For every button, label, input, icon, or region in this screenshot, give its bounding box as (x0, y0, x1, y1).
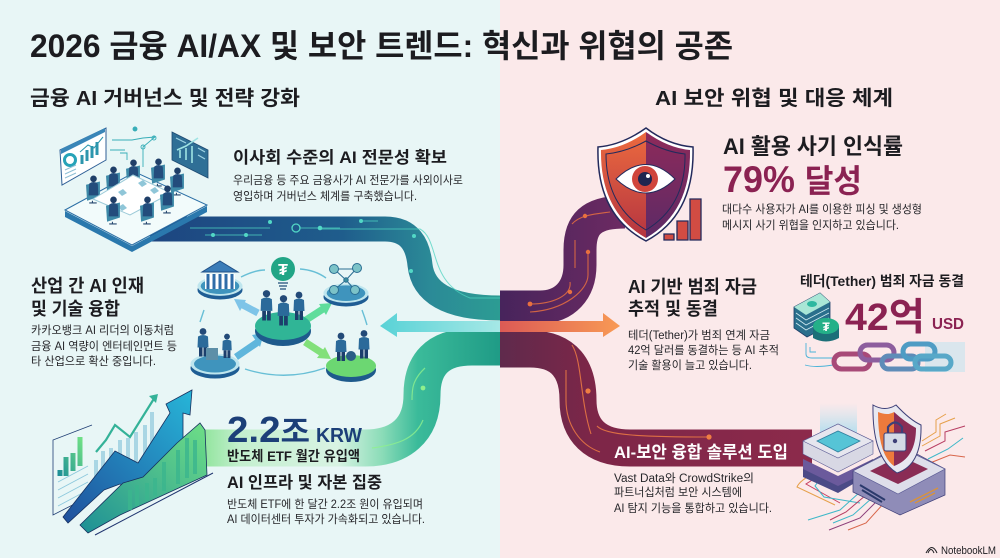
icon: shield with eye (598, 128, 701, 241)
text: fund tracing: 42억 달러를 동결하는 등 AI 추적 (628, 343, 779, 357)
text: solution description: AI 탐지 기능을 통합하고 있습니다. (614, 501, 772, 515)
text: solution description: Vast Data와 CrowdStrike의 (614, 472, 754, 485)
ribbon: bottom-left capital path (205, 347, 500, 448)
background: right pink panel (500, 0, 1000, 558)
text: fraud awareness (722, 134, 922, 232)
text: board expertise (233, 148, 463, 203)
icon: money stack and tether coin (794, 293, 839, 342)
icon: money stack and tether coin: ₮ (822, 320, 830, 334)
heading: left section: 금융 AI 거버넌스 및 전략 강화 (30, 87, 300, 110)
stat: 2.2 trillion won (227, 409, 362, 464)
tether bulb: ₮ (278, 262, 288, 279)
padlock shield (873, 405, 921, 473)
text: AI infrastructure (227, 473, 425, 526)
right screen (172, 132, 208, 178)
text: fund tracing: 기술 활용이 늘고 있습니다. (628, 358, 752, 372)
text: solution description: 파트너십처럼 보안 시스템에 (614, 486, 742, 499)
text: fraud awareness: 79% 달성 (723, 159, 862, 200)
text: AI infrastructure: AI 데이터센터 투자가 가속화되고 있습니다. (227, 513, 425, 526)
icon: growth chart (53, 390, 213, 535)
stat: 2.2 trillion won: 2.2조 (227, 409, 310, 450)
circuit lines (797, 414, 965, 530)
ribbon: top-right threat path (500, 212, 625, 312)
arrow: left cyan arrow (380, 313, 500, 337)
center platform (255, 290, 311, 346)
heading: right section: AI 보안 위협 및 대응 체계 (655, 87, 893, 110)
lower server (853, 445, 945, 515)
background: left teal panel (0, 0, 500, 558)
text: talent fusion: 타 산업으로 확산 중입니다. (31, 355, 156, 368)
text: board expertise: 우리금융 등 주요 금융사가 AI 전문가를 사외이사로 (233, 174, 463, 187)
handshake platform (326, 330, 376, 382)
stat: tether freeze: 42억 (845, 297, 925, 339)
text: fund tracing: 테더(Tether)가 범죄 연계 자금 (628, 329, 770, 342)
text: board expertise: 영입하며 거버넌스 체계를 구축했습니다. (233, 189, 417, 203)
arrow: right orange arrow (500, 313, 620, 337)
glow beam (820, 403, 857, 445)
text: solution heading on ribbon: AI-보안 융합 솔루션 도입 (614, 443, 788, 462)
text: talent fusion: 카카오뱅크 AI 리더의 이동처럼 (31, 324, 174, 337)
stat: tether freeze: 테더(Tether) 범죄 자금 동결 (800, 273, 964, 289)
text: talent fusion: 산업 간 AI 인재 (31, 276, 144, 296)
stat: tether freeze (800, 273, 964, 339)
icon: isometric boardroom (60, 127, 208, 252)
text: board expertise: 이사회 수준의 AI 전문성 확보 (233, 148, 447, 167)
text: AI infrastructure: AI 인프라 및 자본 집중 (227, 473, 382, 492)
left screen (60, 128, 106, 185)
ribbon: bottom-right solution path (500, 345, 812, 452)
icon: talent network diagram (190, 257, 376, 382)
text: talent fusion: 금융 AI 역량이 엔터테인먼트 등 (31, 340, 177, 353)
network lines above table (110, 127, 156, 167)
upper server (803, 424, 873, 493)
text: fraud awareness: 메시지 사기 위협을 인지하고 있습니다. (722, 218, 899, 232)
people with desk (198, 328, 232, 360)
bank icon (202, 261, 238, 289)
network nodes (330, 264, 362, 294)
connecting arrows (200, 269, 367, 375)
stat: 2.2 trillion won: KRW (316, 425, 362, 447)
text: fraud awareness: AI 활용 사기 인식률 (723, 134, 903, 159)
tether bulb (271, 257, 295, 289)
text: fraud awareness: 대다수 사용자가 AI를 이용한 피싱 및 생성형 (722, 203, 922, 216)
stat: tether freeze: USD (932, 316, 964, 333)
text: talent fusion (31, 276, 177, 368)
text: AI infrastructure: 반도체 ETF에 한 달간 2.2조 원이 유입되며 (227, 497, 423, 511)
text: solution description (614, 472, 772, 515)
ribbon: top-left governance path (150, 219, 500, 308)
text: fund tracing (628, 277, 779, 372)
text: fund tracing: 추적 및 동결 (628, 299, 718, 319)
text: talent fusion: 및 기술 융합 (31, 299, 120, 319)
text: fund tracing: AI 기반 범죄 자금 (628, 277, 757, 297)
title: 2026 금융 AI/AX 및 보안 트렌드: 혁신과 위협의 공존 (30, 28, 733, 64)
icon: server with shield and circuits (797, 403, 965, 530)
icon: broken chain (805, 342, 965, 372)
stat: 2.2 trillion won: 반도체 ETF 월간 유입액 (227, 448, 360, 464)
